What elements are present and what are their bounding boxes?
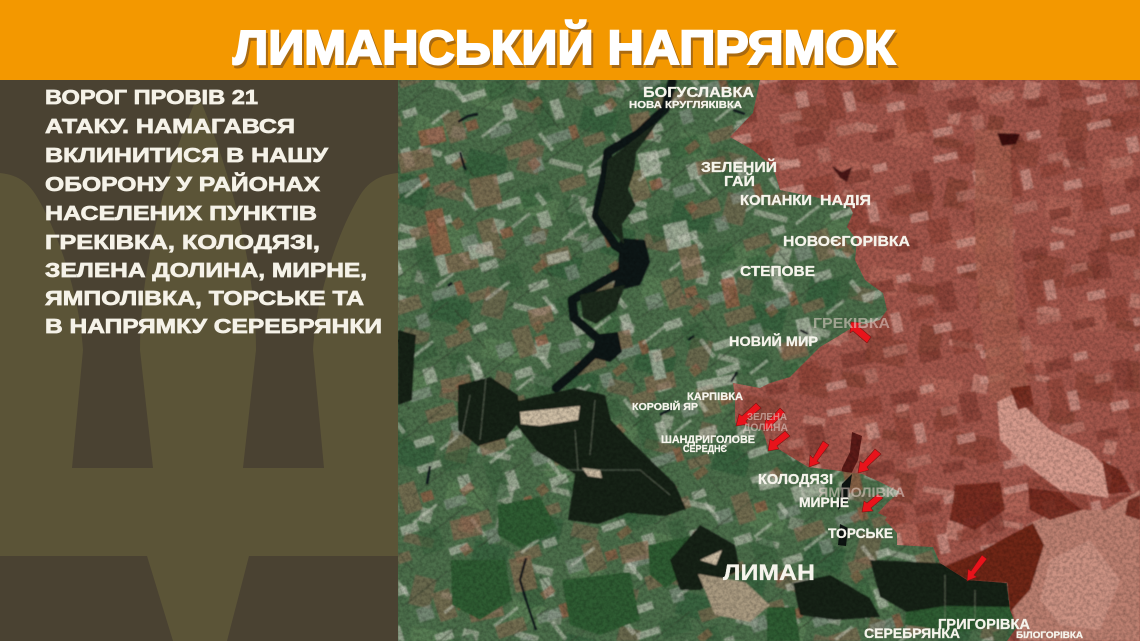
road lines in forest xyxy=(462,378,975,625)
sub: dark forest on occupied side xyxy=(832,133,1140,612)
sub: pale quarry on occupied side xyxy=(997,395,1112,498)
label: Nadiia: НАДІЯ xyxy=(820,193,871,209)
label: Zelenyi Hai xyxy=(701,158,777,190)
label: Bilohorivka: БІЛОГОРІВКА xyxy=(1016,630,1083,641)
label: Serednie: СЕРЕДНЄ xyxy=(683,444,727,455)
label: Kolodiazi: КОЛОДЯЗІ xyxy=(758,471,833,488)
label: Zelena Dolyna: ДОЛИНА xyxy=(743,422,788,434)
text block: attack summary: АТАКУ. НАМАГАВСЯ xyxy=(45,116,295,138)
text block: attack summary: ЗЕЛЕНА ДОЛИНА, МИРНЕ, xyxy=(45,260,367,282)
quarry: pale chalk areas xyxy=(520,406,770,622)
label: Hryhorivka: ГРИГОРІВКА xyxy=(938,616,1030,633)
river: dark channel near Yampolivka xyxy=(842,432,862,473)
label: Serebrianka: СЕРЕБРЯНКА xyxy=(864,626,960,641)
text block: attack summary: НАСЕЛЕНИХ ПУНКТІВ xyxy=(45,203,317,225)
header bar xyxy=(0,0,1140,80)
label: Kopanky: КОПАНКИ xyxy=(740,193,812,209)
label: Korovii Yar: КОРОВІЙ ЯР xyxy=(632,400,698,413)
label: Zelenyi Hai: ЗЕЛЕНИЙ xyxy=(701,158,777,176)
river: Oskil reservoir xyxy=(556,82,672,388)
label: Bohuslavka: БОГУСЛАВКА xyxy=(643,84,754,101)
title: ЛИМАНСЬКИЙ НАПРЯМОК xyxy=(235,23,898,78)
label: Myrne: МИРНЕ xyxy=(799,494,849,510)
arrow: Hrekivka xyxy=(850,322,871,343)
map: satellite base xyxy=(398,80,1016,641)
text block: attack summary: ВКЛИНИТИСЯ В НАШУ xyxy=(45,145,329,167)
sub: settlement strip xyxy=(975,130,1030,400)
label: Zelenyi Hai: ГАЙ xyxy=(724,172,755,190)
arrow: Serebrianka direction xyxy=(967,555,987,581)
label: Stepove: СТЕПОВЕ xyxy=(740,263,815,280)
text block: attack summary: ЯМПОЛІВКА, ТОРСЬКЕ ТА xyxy=(45,288,364,310)
label: Torske: ТОРСЬКЕ xyxy=(828,525,893,541)
text block: attack summary: ГРЕКІВКА, КОЛОДЯЗІ, xyxy=(45,232,320,254)
icon: trident emblem watermark xyxy=(0,95,398,641)
text block: attack summary: ОБОРОНУ У РАЙОНАХ xyxy=(45,172,321,196)
label: Novyi Myr: НОВИЙ МИР xyxy=(729,332,818,349)
label: Zelena Dolyna xyxy=(743,412,788,434)
texture: map grain xyxy=(398,80,1140,641)
forest: green woodland xyxy=(451,497,1015,641)
label: Zelena Dolyna: ЗЕЛЕНА xyxy=(747,412,787,423)
label: Yampolivka: ЯМПОЛІВКА xyxy=(818,484,905,500)
label: Hrekivka: ГРЕКІВКА xyxy=(813,315,890,332)
label: Nova Kruhliakivka: НОВА КРУГЛЯКІВКА xyxy=(629,99,742,111)
forest: dark pine massifs xyxy=(398,330,1010,620)
sub: ravines and river branches xyxy=(395,110,808,630)
panel: left text panel xyxy=(0,80,398,641)
text block: attack summary: ВОРОГ ПРОВІВ 21 xyxy=(45,87,258,109)
map: occupied territory red overlay xyxy=(700,80,1140,641)
label: Novoiehorivka: НОВОЄГОРІВКА xyxy=(783,233,910,250)
arrow: Zelena Dolyna west xyxy=(736,403,761,426)
label: Lyman: ЛИМАН xyxy=(723,560,815,585)
arrow: Kolodiazi xyxy=(809,441,829,467)
label: Karpivka: КАРПІВКА xyxy=(687,391,743,403)
text block: attack summary: В НАПРЯМКУ СЕРЕБРЯНКИ xyxy=(45,316,382,338)
arrow: Zelena Dolyna south xyxy=(768,431,790,451)
arrow: Yampolivka south xyxy=(862,494,883,512)
map labels: settlements xyxy=(629,84,1083,641)
label: Shandryholove: ШАНДРИГОЛОВЕ xyxy=(661,434,755,446)
text block: attack summary xyxy=(45,87,382,338)
title: ЛИМАНСЬКИЙ НАПРЯМОК xyxy=(233,20,896,75)
arrow: Yampolivka north xyxy=(858,449,881,473)
arrow: Zelena Dolyna east xyxy=(763,408,785,430)
